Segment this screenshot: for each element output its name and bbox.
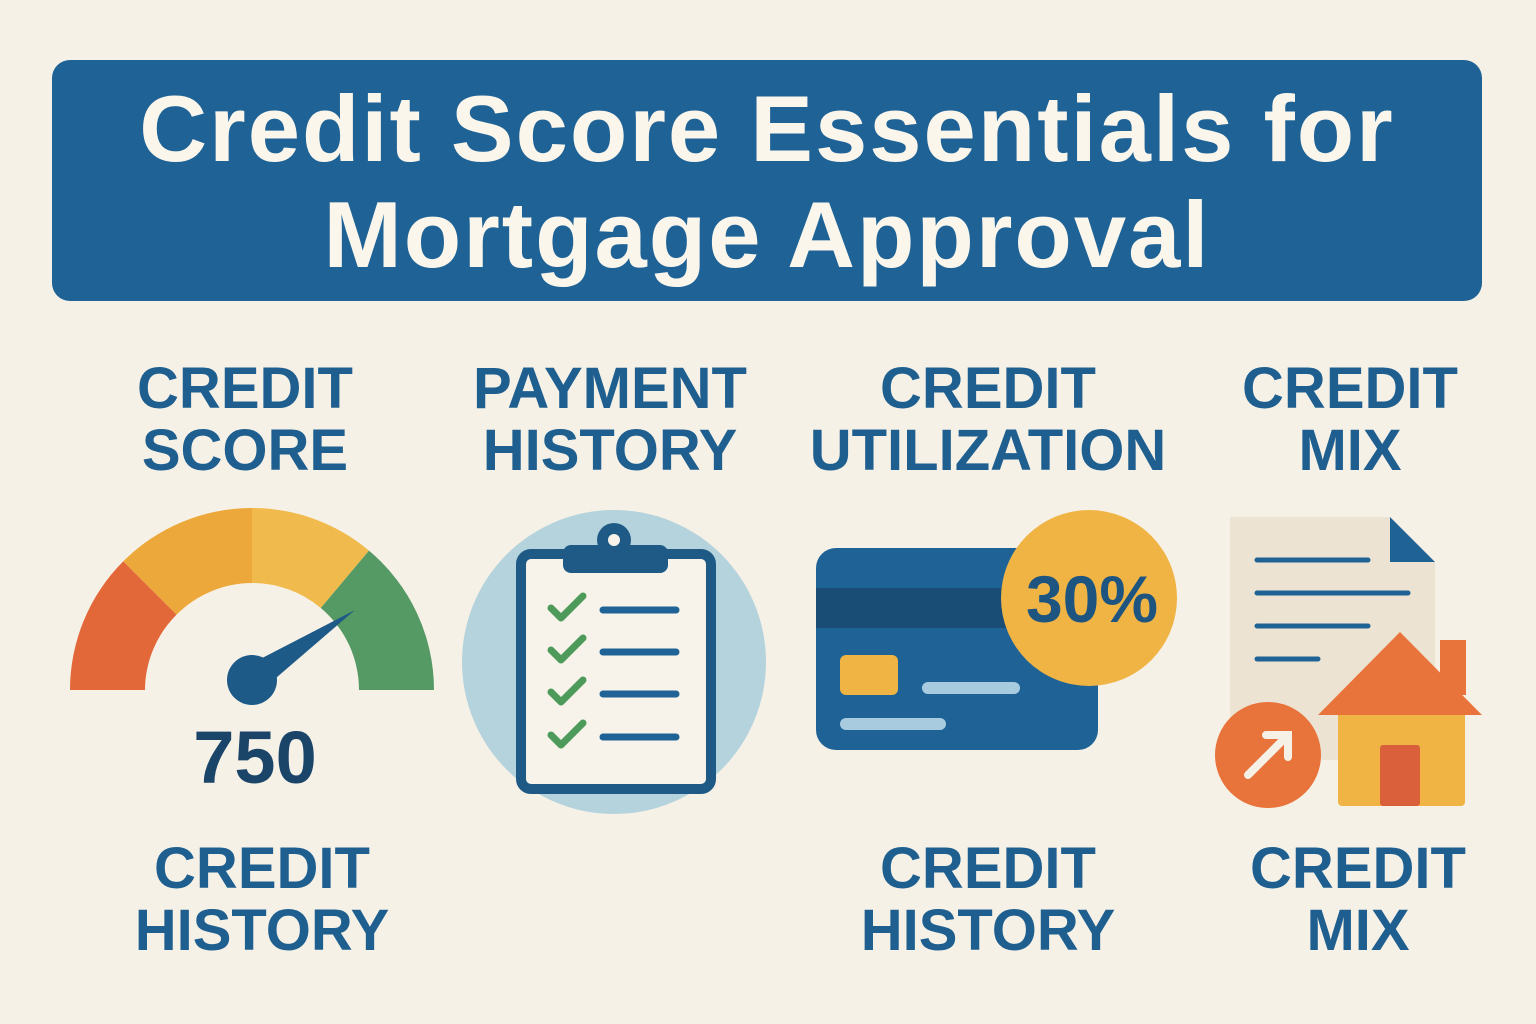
heading: credit utilization <box>810 356 1166 483</box>
title <box>52 60 1482 301</box>
heading: credit mix: MIX <box>1298 418 1402 483</box>
label: credit mix 2 <box>1250 836 1466 963</box>
title: Credit Score Essentials for <box>139 76 1395 181</box>
icon: document and house <box>1215 517 1482 808</box>
label: credit mix 2: CREDIT <box>1250 836 1466 901</box>
label: credit history 1: CREDIT <box>154 836 370 901</box>
heading: credit score <box>137 356 353 483</box>
heading: payment history <box>473 356 747 483</box>
heading: credit mix <box>1242 356 1458 483</box>
label: credit history 1: HISTORY <box>135 898 389 963</box>
label: credit mix 2: MIX <box>1306 898 1410 963</box>
heading: credit mix: CREDIT <box>1242 356 1458 421</box>
heading: credit utilization: CREDIT <box>880 356 1096 421</box>
heading: credit score: CREDIT <box>137 356 353 421</box>
icon: credit card with 30%: 30% <box>1026 562 1158 636</box>
icon: gauge: 750 <box>193 716 317 799</box>
label: credit history 2 <box>861 836 1115 963</box>
icon: credit card with 30% <box>816 510 1177 750</box>
label: credit history 1 <box>135 836 389 963</box>
label: credit history 2: CREDIT <box>880 836 1096 901</box>
heading: credit utilization: UTILIZATION <box>810 418 1166 483</box>
label: credit history 2: HISTORY <box>861 898 1115 963</box>
heading: payment history: PAYMENT <box>473 356 747 421</box>
heading: credit score: SCORE <box>142 418 348 483</box>
icon: clipboard <box>462 510 766 814</box>
title: Mortgage Approval <box>323 182 1211 287</box>
heading: payment history: HISTORY <box>483 418 737 483</box>
icon: gauge <box>70 508 434 799</box>
